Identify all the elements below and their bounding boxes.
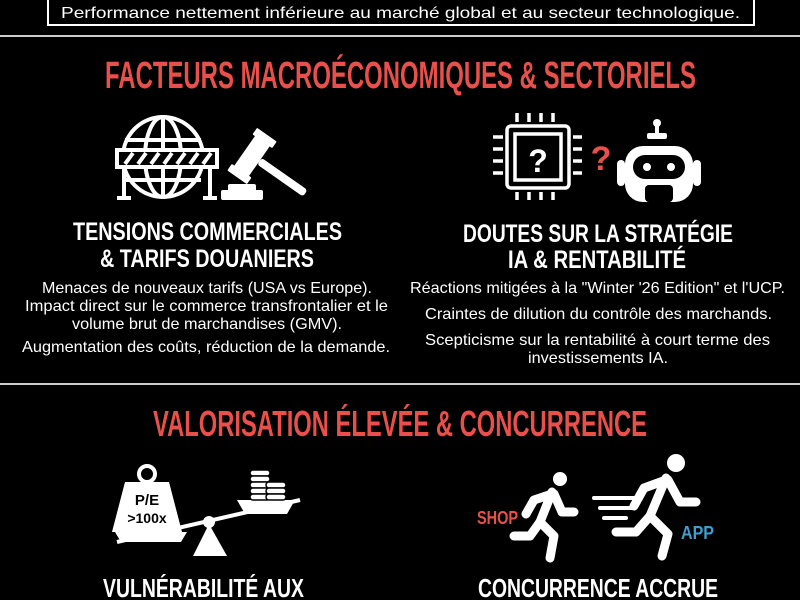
icon: AI chip, question mark, robot [493, 113, 701, 202]
text: doutes body: Réactions mitigées à la "Winter '26 Edition" et l'UCP. [410, 280, 785, 297]
text: doutes body: investissements IA. [528, 350, 668, 367]
top summary box [48, 0, 754, 25]
text: doutes body: Scepticisme sur la rentabilité à court terme des [425, 332, 770, 349]
icon: AI chip, question mark, robot: ? [528, 143, 548, 179]
text: doutes body [410, 280, 785, 367]
icon: runners shop vs app [477, 454, 714, 558]
icon: AI chip, question mark, robot: ? [591, 140, 611, 178]
text: tensions body [22, 280, 390, 356]
title: doutes IA [463, 219, 733, 274]
icon: P/E weight on seesaw: >100x [127, 510, 167, 526]
text: tensions body: volume brut de marchandises (GMV). [72, 316, 342, 333]
title: tensions commerciales: TENSIONS COMMERCIALES [73, 218, 342, 246]
text: tensions body: Augmentation des coûts, réduction de la demande. [22, 339, 390, 356]
text: doutes body: Craintes de dilution du contrôle des marchands. [425, 306, 772, 323]
icon: globe with barrier and gavel [117, 117, 320, 215]
top summary box: Performance nettement inférieure au marché global et au secteur technologique. [61, 5, 740, 22]
icon: P/E weight on seesaw [112, 466, 300, 556]
title: tensions commerciales [73, 218, 342, 273]
icon: runners shop vs app: SHOP [477, 508, 518, 528]
text: tensions body: Impact direct sur le commerce transfrontalier et le [25, 298, 388, 315]
title: tensions commerciales: & TARIFS DOUANIERS [100, 245, 314, 273]
icon: P/E weight on seesaw: P/E [135, 492, 159, 509]
title: doutes IA: IA & RENTABILITÉ [508, 245, 686, 274]
text: tensions body: Menaces de nouveaux tarifs (USA vs Europe). [42, 280, 372, 297]
icon: runners shop vs app: APP [681, 523, 714, 543]
